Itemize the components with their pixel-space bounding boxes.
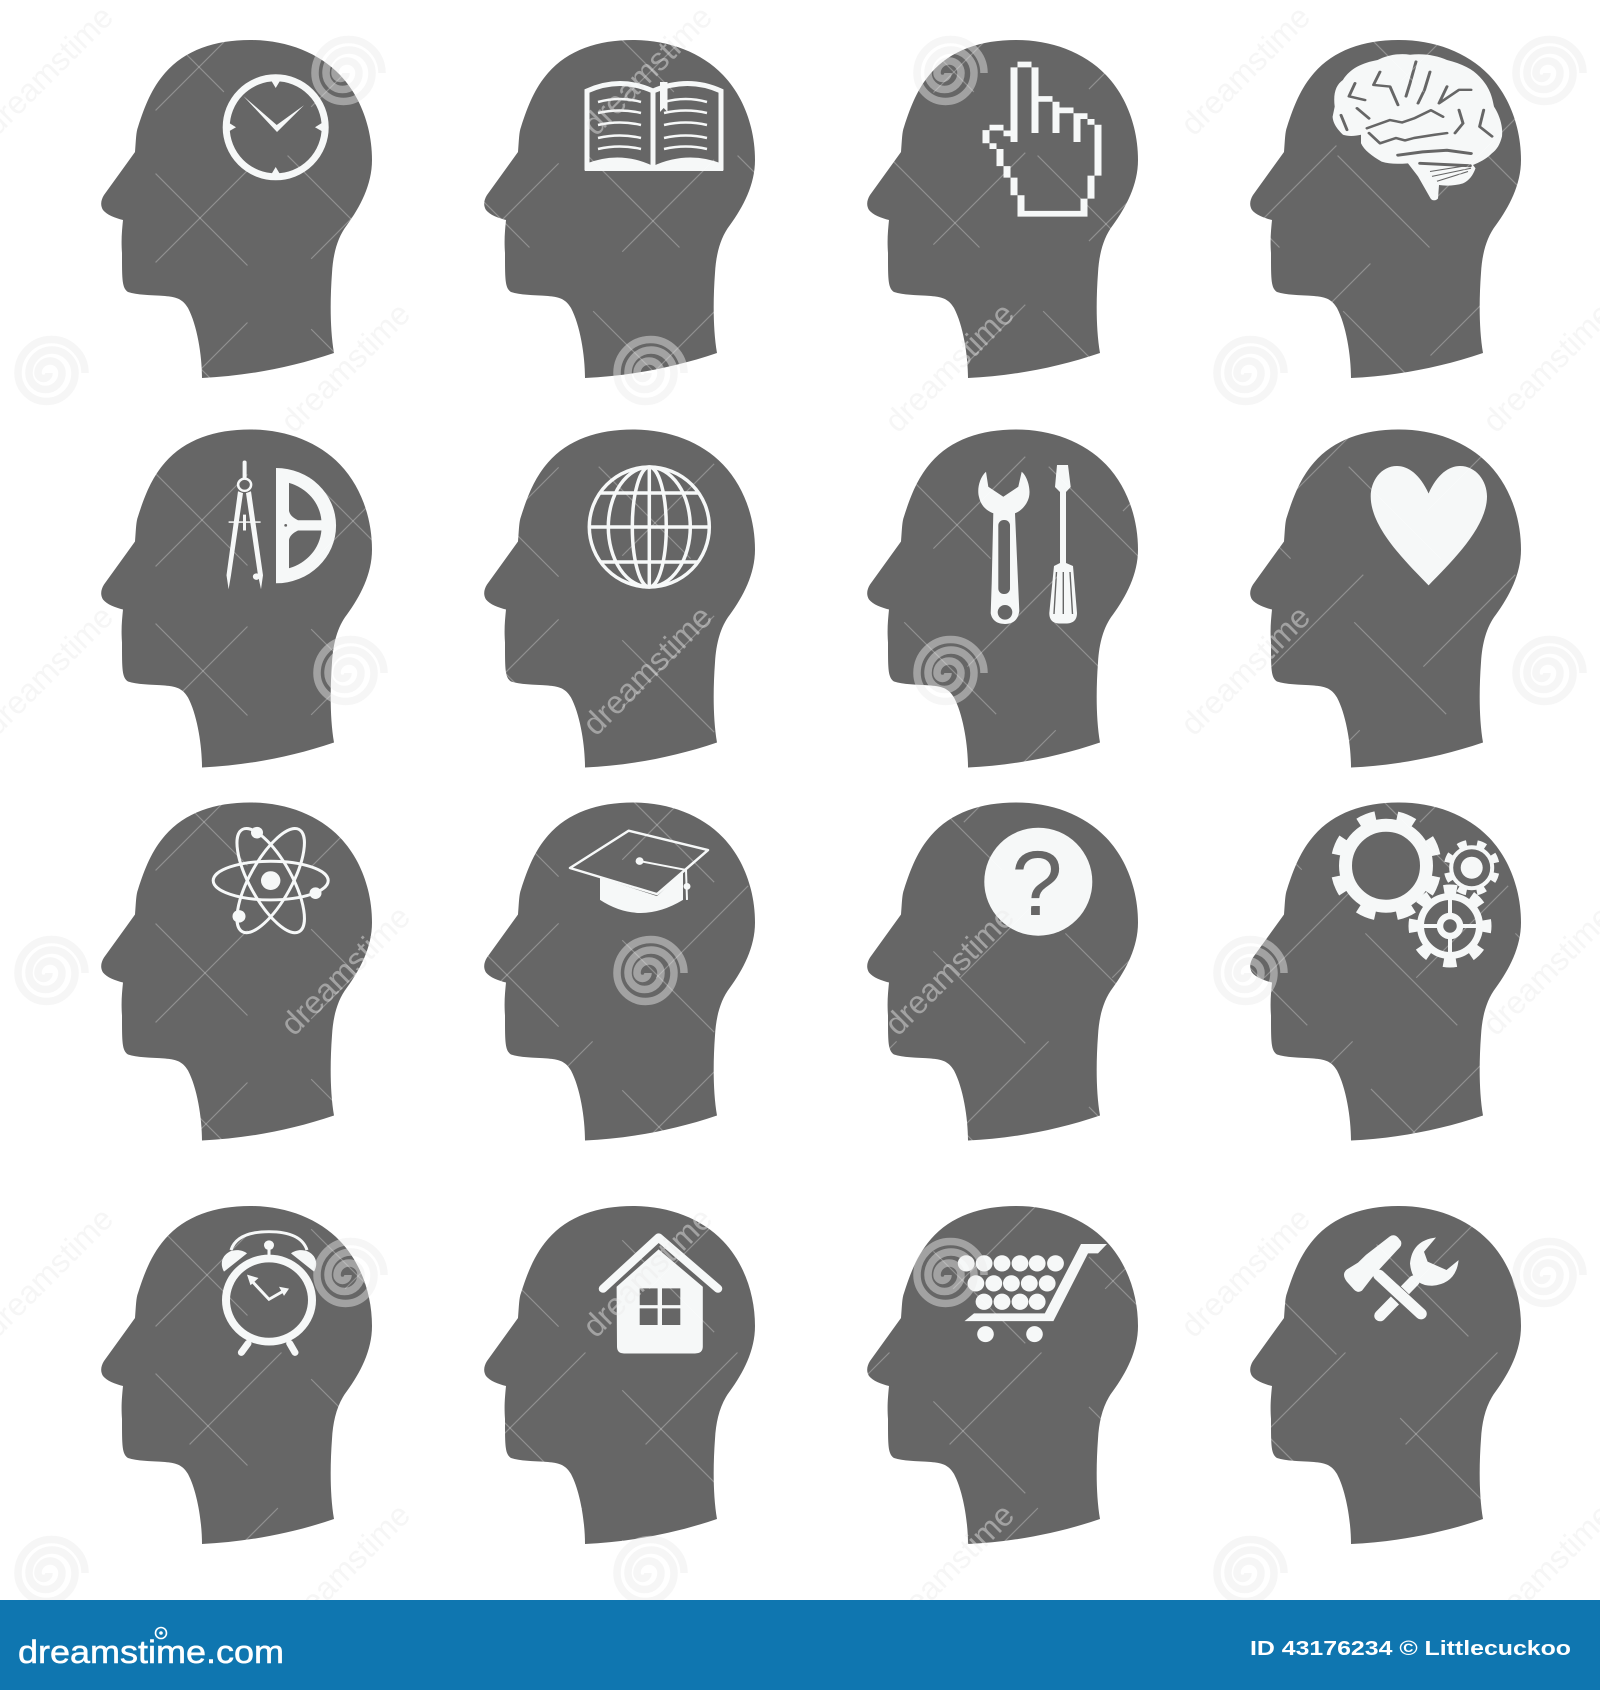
watermark: dreamstime text: dreamstime — [273, 898, 417, 1042]
head: house — [484, 1206, 755, 1544]
head: wrench and screwdriver — [867, 430, 1138, 768]
watermark: dreamstime text: dreamstime — [575, 0, 719, 142]
icon: globe — [589, 467, 709, 587]
head: question mark — [867, 802, 1138, 1140]
head: gears — [1250, 802, 1521, 1140]
head: hammer and wrench — [1250, 1206, 1521, 1544]
icon: compass and protractor — [226, 460, 336, 589]
head: heart — [1250, 430, 1521, 768]
footer credit: ID 43176234 © Littlecuckoo — [1250, 1638, 1571, 1660]
icon: wrench and screwdriver — [978, 465, 1077, 624]
watermark: dreamstime text: dreamstime — [1173, 598, 1317, 742]
icon: alarm clock — [222, 1232, 316, 1352]
icon: house — [603, 1237, 718, 1353]
head: pixel hand cursor — [867, 40, 1138, 378]
head: clock — [101, 40, 372, 378]
head: compass and protractor — [101, 430, 372, 768]
watermark: dreamstime text: dreamstime — [273, 1496, 417, 1640]
icon: heart — [1371, 466, 1487, 585]
head: globe — [484, 430, 755, 768]
head: alarm clock — [101, 1206, 372, 1544]
watermark: dreamstime text: dreamstime — [1173, 1200, 1317, 1344]
watermark: dreamstime text: dreamstime — [877, 898, 1021, 1042]
watermark: dreamstime text: dreamstime — [575, 598, 719, 742]
icon: clock — [226, 78, 325, 177]
watermark: dreamstime text: dreamstime — [575, 1200, 719, 1344]
footer logo: dreamstime.com — [18, 1634, 284, 1670]
icon: pixel hand cursor — [986, 64, 1098, 217]
icon: open book — [585, 82, 723, 171]
icon: atom — [213, 820, 328, 941]
icon: hammer and wrench — [1344, 1235, 1459, 1316]
icon: question mark — [984, 828, 1092, 936]
icon: gears — [1335, 815, 1497, 963]
head: shopping cart — [867, 1206, 1138, 1544]
icon: brain — [1333, 54, 1502, 200]
watermark: dreamstime text: dreamstime — [877, 295, 1021, 439]
head: open book — [484, 40, 755, 378]
head: graduation cap — [484, 802, 755, 1140]
watermark: dreamstime text: dreamstime — [1173, 0, 1317, 142]
watermark: dreamstime text: dreamstime — [877, 1496, 1021, 1640]
icon: graduation cap — [570, 831, 708, 913]
icon: question mark: ? — [1011, 833, 1063, 935]
icon: shopping cart — [958, 1244, 1107, 1342]
head: atom — [101, 802, 372, 1140]
footer bar — [0, 1600, 1600, 1690]
head: brain — [1250, 40, 1521, 378]
watermark: dreamstime text: dreamstime — [273, 295, 417, 439]
